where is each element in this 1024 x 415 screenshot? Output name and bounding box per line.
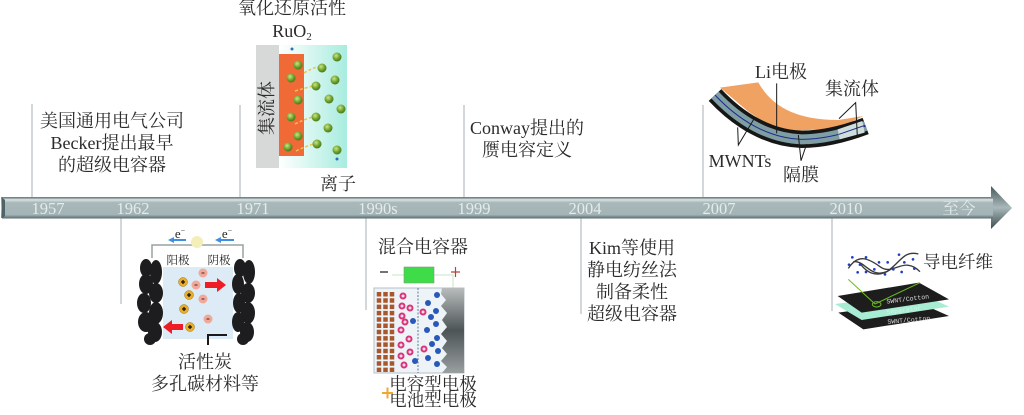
ions — [284, 52, 346, 154]
green wire — [848, 279, 920, 304]
label: RuO2: 2 — [306, 31, 312, 43]
orange plus — [382, 388, 393, 398]
panel: 1971 pseudocapacitor illustration — [238, 0, 356, 194]
electron paths — [295, 67, 318, 151]
text: 1957 event: Becker提出最早 — [51, 133, 173, 153]
fibre dots — [848, 253, 916, 276]
year labels: 1990s — [358, 199, 398, 218]
text: 1999 event: Conway提出的 — [470, 118, 584, 138]
legend text: 电池型电极 — [389, 390, 477, 410]
timeline arrow — [1, 186, 1012, 229]
text: 1957 event: 的超级电容器 — [58, 154, 166, 175]
caption: activated carbon: 多孔碳材料等 — [151, 374, 259, 394]
bottom layer — [838, 302, 949, 329]
strip end cap — [838, 121, 865, 139]
caption: activated carbon: 活性炭 — [178, 352, 232, 372]
text: 1957 event: 美国通用电气公司 — [40, 111, 184, 131]
electron flow labels: − — [181, 226, 186, 235]
text: 2004 event: Kim等使用 — [589, 238, 675, 258]
panel: 1990s hybrid capacitor — [374, 237, 477, 410]
green ring — [872, 302, 881, 307]
separator — [417, 288, 419, 373]
text: 2004 event — [587, 238, 678, 324]
grey electrode — [441, 288, 464, 373]
pink ions — [398, 294, 426, 368]
black wire — [208, 335, 227, 345]
right carbon electrode — [232, 259, 255, 345]
current collector — [256, 45, 279, 168]
layer labels: Separator — [886, 305, 922, 316]
layer labels — [886, 293, 931, 326]
separator layer — [835, 293, 949, 320]
left carbon electrode — [137, 259, 163, 345]
heading: hybrid capacitor: 混合电容器 — [378, 237, 468, 257]
year labels — [32, 199, 976, 218]
electrode labels: 阳极 — [166, 253, 190, 267]
curved device — [715, 82, 866, 161]
year labels: 2007 — [702, 199, 736, 218]
brown particles — [379, 292, 392, 372]
text: 1957 event — [40, 111, 184, 175]
text: 2004 event: 超级电容器 — [587, 303, 677, 324]
electron flow labels: − — [228, 226, 233, 235]
layered fabric — [835, 253, 949, 329]
electron flow labels — [175, 226, 233, 241]
year labels: 1957 — [32, 199, 64, 218]
battery — [404, 267, 434, 283]
label: MWNTs: MWNTs — [709, 151, 771, 171]
vertical label: collector: 集流体 — [257, 81, 277, 135]
label: ions: 离子 — [320, 174, 356, 194]
year connector lines — [32, 104, 832, 314]
electrolyte background — [279, 45, 347, 168]
battery wire — [392, 275, 453, 288]
text: 1999 event: 赝电容定义 — [482, 140, 572, 160]
year labels: 1999 — [458, 199, 490, 218]
fibres — [848, 253, 920, 274]
orange electrode surface — [720, 82, 863, 132]
label: conductive fibre: 导电纤维 — [923, 252, 993, 272]
layered strip — [715, 95, 866, 139]
cell background — [374, 288, 464, 373]
minus and plus signs — [380, 267, 460, 277]
caption: activated carbon — [151, 352, 259, 394]
electrode labels — [166, 253, 231, 267]
text: 2004 event: 静电纺丝法 — [587, 260, 678, 280]
year labels: 2004 — [568, 199, 602, 218]
panel: 2007 flexible battery illustration — [709, 61, 879, 185]
text: 2004 event: 制备柔性 — [596, 282, 668, 302]
leader lines — [738, 83, 857, 161]
positive ions — [178, 278, 194, 332]
electrode labels: 阴极 — [208, 253, 231, 267]
positive ion marks — [181, 280, 192, 329]
electron flow arrows — [168, 237, 234, 243]
electron flow labels: e — [175, 226, 181, 241]
layer labels: SWNT/Cotton — [886, 293, 930, 306]
label: separator: 隔膜 — [783, 165, 819, 185]
end cap layer — [839, 125, 865, 134]
electron flow labels: e — [222, 226, 228, 241]
top layer — [838, 283, 949, 313]
red ion arrows — [163, 278, 226, 334]
label: RuO2: RuO — [272, 21, 306, 41]
panel: 2010 conductive fibre textile — [835, 252, 993, 329]
year labels: 2010 — [830, 199, 862, 218]
legend text — [389, 374, 477, 410]
negative ions — [192, 268, 212, 324]
blue ions — [410, 292, 441, 367]
pointer dots — [290, 48, 338, 160]
year labels: 1971 — [236, 199, 270, 218]
label: collector: 集流体 — [825, 79, 879, 99]
layer labels: SWNT/Cotton — [887, 315, 931, 326]
year labels: 1962 — [116, 199, 150, 218]
text: 1999 event — [470, 118, 584, 160]
bulb — [191, 236, 203, 248]
legend text: 电容型电极 — [389, 374, 477, 394]
year labels: 至今 — [942, 199, 976, 218]
RuO2 layer — [279, 54, 304, 156]
panel: 1962 activated carbon supercapacitor — [137, 226, 259, 394]
circuit wire — [152, 245, 243, 258]
negative ion marks — [194, 273, 210, 319]
label: Li electrode: Li电极 — [755, 61, 807, 82]
electrolyte — [163, 267, 233, 339]
